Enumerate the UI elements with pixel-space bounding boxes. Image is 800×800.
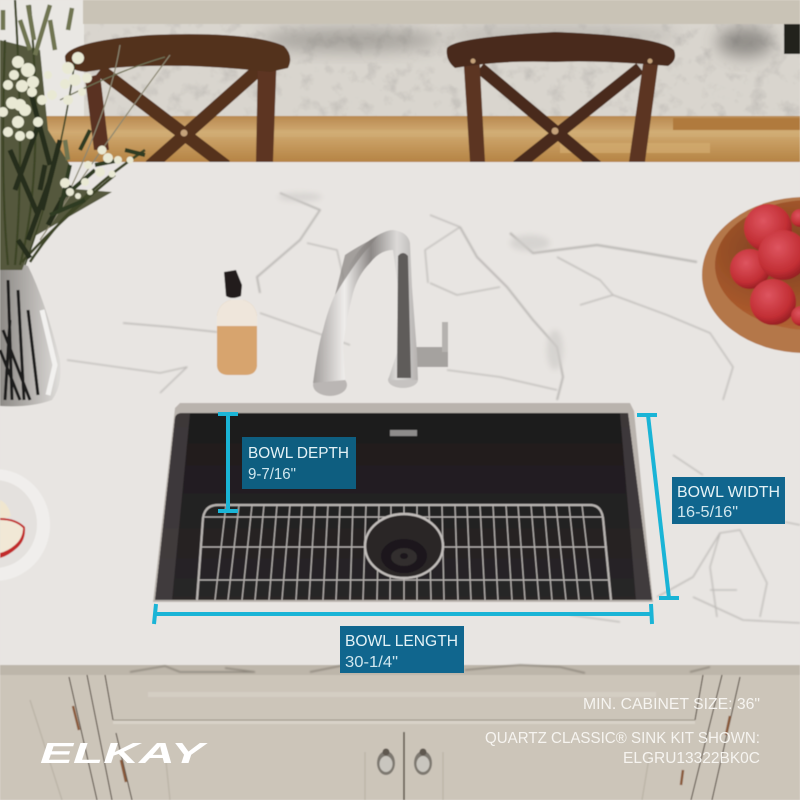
sink side shading [155, 413, 652, 600]
text: sink kit shown: ELGRU13322BK0C [623, 750, 760, 767]
marble veins [67, 193, 800, 623]
faucet spout [313, 230, 418, 383]
wooden bowl of apples [702, 197, 800, 353]
marble countertop [0, 162, 800, 665]
callout: bowl width: BOWL WIDTH [677, 484, 780, 501]
overflow slot [390, 430, 417, 436]
dark furniture corner [784, 24, 800, 54]
background wall rug [0, 0, 800, 116]
faucet [313, 230, 448, 396]
glass vase [0, 262, 61, 406]
text: minimum cabinet size: MIN. CABINET SIZE: 36" [583, 696, 760, 713]
flowering plant [0, 0, 170, 270]
plant blossoms [0, 52, 134, 199]
sink bowl interior [155, 413, 652, 600]
faucet lever handle [412, 347, 448, 367]
marble vein blotches [278, 193, 563, 370]
cabinet [0, 675, 800, 800]
callout: bowl width: 16-5/16" [677, 504, 738, 521]
callout: bowl depth: BOWL DEPTH [248, 445, 349, 462]
plant foliage mass [0, 40, 112, 270]
faucet bases [313, 374, 347, 396]
wood floor [0, 116, 800, 162]
dimension: bowl length [154, 604, 652, 624]
dimension: bowl depth [218, 414, 238, 511]
left chair [65, 34, 290, 166]
bench seat at top [83, 0, 800, 24]
text: sink kit shown: QUARTZ CLASSIC® SINK KIT SHOWN: [485, 730, 760, 747]
callout: bowl width [672, 477, 785, 524]
callout: bowl depth: 9-7/16" [248, 466, 296, 483]
callout: bowl depth [242, 437, 356, 489]
sink [153, 403, 653, 602]
cabinet door pulls [377, 748, 432, 775]
right chair [447, 32, 675, 166]
logo: Elkay: ELKAY [40, 738, 209, 770]
counter front edge [0, 665, 800, 675]
dimension: bowl width [637, 415, 679, 598]
faucet dark pull-down stem [397, 253, 411, 378]
callout: bowl length [340, 626, 464, 673]
text: sink kit shown [485, 730, 760, 767]
drain strainer [365, 514, 443, 578]
plate with apple slices [0, 469, 50, 581]
bottom grid [197, 505, 611, 600]
soap bottle [217, 270, 257, 375]
callout: bowl length: BOWL LENGTH [345, 633, 458, 650]
callout: bowl length: 30-1/4" [345, 654, 398, 671]
sink rim [153, 403, 653, 602]
plant stems and leaves [3, 0, 170, 265]
